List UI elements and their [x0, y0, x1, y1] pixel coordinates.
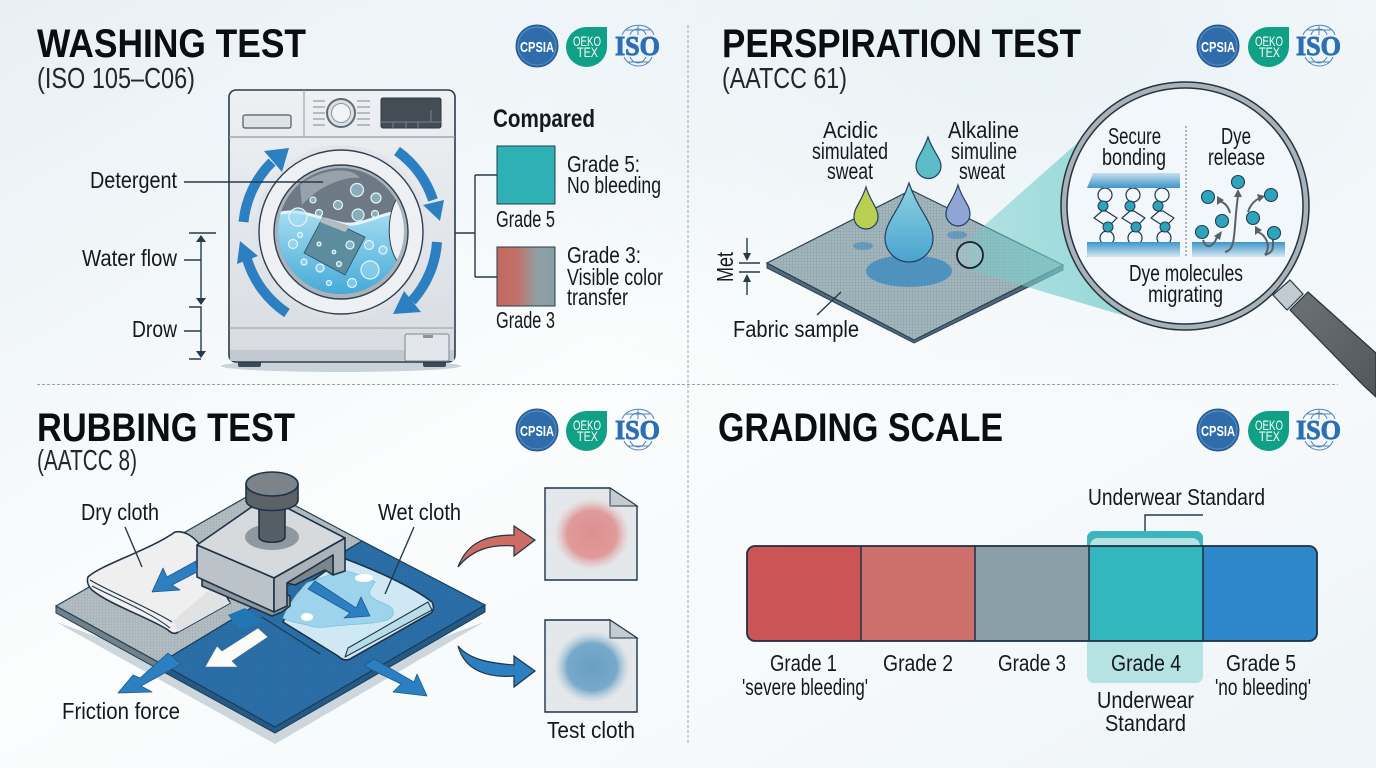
label: acidic sweat: sweat — [827, 158, 873, 184]
panel: rubbing test — [37, 406, 660, 744]
label: alkaline sweat: sweat — [959, 158, 1005, 184]
wet cloth — [283, 558, 433, 660]
label: alkaline sweat: Alkaline — [948, 117, 1019, 143]
label: drow — [132, 307, 206, 359]
heading: perspiration test: PERSPIRATION TEST — [722, 22, 1081, 66]
certification badges: OEKO — [573, 417, 601, 433]
press block — [197, 472, 345, 616]
label: alkaline sweat: simuline — [951, 138, 1017, 164]
diagram: secure bonding chains — [1087, 173, 1180, 257]
subheading: AATCC 61: (AATCC 61) — [722, 63, 847, 95]
label: acidic sweat: Acidic — [823, 117, 878, 143]
magnifier beam — [970, 137, 1132, 318]
label: dry cloth — [81, 499, 159, 567]
lens text: secure bonding — [1102, 123, 1166, 170]
label: grade 4: Grade 4 — [1111, 650, 1181, 676]
lens text: dye release: release — [1208, 144, 1265, 170]
panel: perspiration test — [712, 22, 1376, 397]
label: grade 3: Grade 3 — [998, 650, 1066, 676]
certification badges: ISO — [1296, 415, 1341, 445]
fabric sample — [767, 190, 1063, 343]
motion arrows — [118, 561, 427, 696]
certification badges: TEX — [577, 44, 599, 60]
test cloth: red stain — [545, 488, 637, 580]
label: fabric sample — [733, 292, 859, 342]
label: dry cloth: Dry cloth — [81, 499, 159, 525]
label: underwear standard callout: Underwear Standard — [1088, 484, 1265, 510]
certification badges: CPSIA — [1201, 423, 1235, 440]
label: grade 1: 'severe bleeding' — [742, 674, 868, 700]
heading: rubbing test: RUBBING TEST — [37, 406, 295, 450]
certification badges: OEKO — [1255, 417, 1283, 433]
label: grade 4: Standard — [1105, 710, 1186, 736]
text: grade 3 description — [567, 242, 663, 310]
lens text: dye molecules migrating: Dye molecules — [1129, 260, 1243, 286]
magnifying glass lens — [1061, 82, 1309, 330]
heading: washing test: WASHING TEST — [37, 22, 306, 66]
label: grade 5: Grade 5 — [1226, 650, 1296, 676]
certification badges: ISO — [1296, 31, 1341, 61]
swatch: grade 3: Grade 3 — [496, 307, 555, 333]
text: grade 5 description: No bleeding — [567, 172, 661, 198]
certification badges: ISO — [615, 31, 660, 61]
text: grade 3 description: Visible color — [567, 264, 663, 290]
certification badges: TEX — [577, 428, 599, 444]
thickness indicator: met: Met — [712, 252, 738, 282]
curved arrow: red — [458, 526, 535, 567]
lens text: dye release: Dye — [1221, 123, 1251, 149]
label: grade 4 — [1097, 650, 1194, 736]
white arrow — [205, 628, 268, 667]
label: grade 1: Grade 1 — [770, 650, 837, 676]
magnifying glass handle — [1273, 280, 1376, 397]
certification badges — [1197, 409, 1341, 451]
label: test cloth: Test cloth — [547, 717, 635, 743]
heading: compared: Compared — [493, 105, 595, 133]
label: grade 5 — [1215, 650, 1311, 700]
text: grade 5 description: Grade 5: — [567, 151, 640, 177]
label: acidic sweat: simulated — [812, 138, 888, 164]
certification badges: CPSIA — [520, 39, 554, 56]
lens text: dye molecules migrating — [1129, 260, 1243, 307]
swatch: grade 3 — [496, 247, 555, 333]
label: detergent: Detergent — [90, 167, 178, 193]
magnified spot — [957, 242, 983, 268]
lens text: secure bonding: bonding — [1102, 144, 1166, 170]
heading: grading scale: GRADING SCALE — [718, 406, 1003, 450]
text: grade 5 description — [567, 151, 661, 198]
certification badges — [1197, 25, 1341, 67]
certification badges: CPSIA — [1201, 39, 1235, 56]
curved arrow: blue — [458, 646, 535, 687]
text: grade 3 description: transfer — [567, 284, 628, 310]
label: grade 4: Underwear — [1097, 687, 1194, 713]
certification badges: OEKO — [1255, 33, 1283, 49]
label: water flow: Water flow — [82, 245, 177, 271]
thickness indicator: met — [712, 238, 760, 295]
label: grade 2: Grade 2 — [883, 650, 953, 676]
certification badges: OEKO — [573, 33, 601, 49]
label: drow: Drow — [132, 316, 177, 342]
label: friction force: Friction force — [62, 698, 180, 724]
label: acidic sweat — [812, 117, 888, 184]
droplets — [854, 137, 970, 262]
lens text: dye molecules migrating: migrating — [1148, 281, 1223, 307]
diagram: dye release molecules — [1192, 176, 1285, 257]
test cloth: blue stain — [545, 620, 637, 712]
label: wet cloth — [378, 499, 461, 594]
certification badges — [516, 409, 660, 451]
text: grade 3 description: Grade 3: — [567, 242, 641, 268]
grade scale bar — [747, 546, 1317, 641]
label: grade 1 — [742, 650, 868, 700]
label: grade 5: 'no bleeding' — [1215, 674, 1311, 700]
lens text: dye release — [1208, 123, 1265, 170]
certification badges — [516, 25, 660, 67]
subheading: AATCC 8: (AATCC 8) — [37, 445, 137, 477]
subheading: ISO 105-C06: (ISO 105–C06) — [37, 63, 195, 95]
label: alkaline sweat — [948, 117, 1019, 184]
test plate — [56, 488, 485, 744]
washing machine — [221, 90, 461, 372]
rotation arrows — [237, 148, 444, 314]
swatch: grade 5: Grade 5 — [496, 206, 555, 232]
certification badges: TEX — [1259, 428, 1281, 444]
swatch: grade 5 — [496, 146, 555, 232]
label: water flow — [82, 233, 216, 305]
certification badges: TEX — [1259, 44, 1281, 60]
panel: grading scale — [718, 406, 1341, 736]
lens text: secure bonding: Secure — [1108, 123, 1161, 149]
underwear standard highlight — [1087, 531, 1203, 683]
panel: washing test — [37, 22, 663, 372]
dry cloth — [87, 532, 230, 633]
certification badges: ISO — [615, 415, 660, 445]
certification badges: CPSIA — [520, 423, 554, 440]
label: wet cloth: Wet cloth — [378, 499, 461, 525]
label: fabric sample: Fabric sample — [733, 316, 859, 342]
connector to swatches — [455, 175, 497, 277]
label: underwear standard callout — [1088, 484, 1265, 531]
